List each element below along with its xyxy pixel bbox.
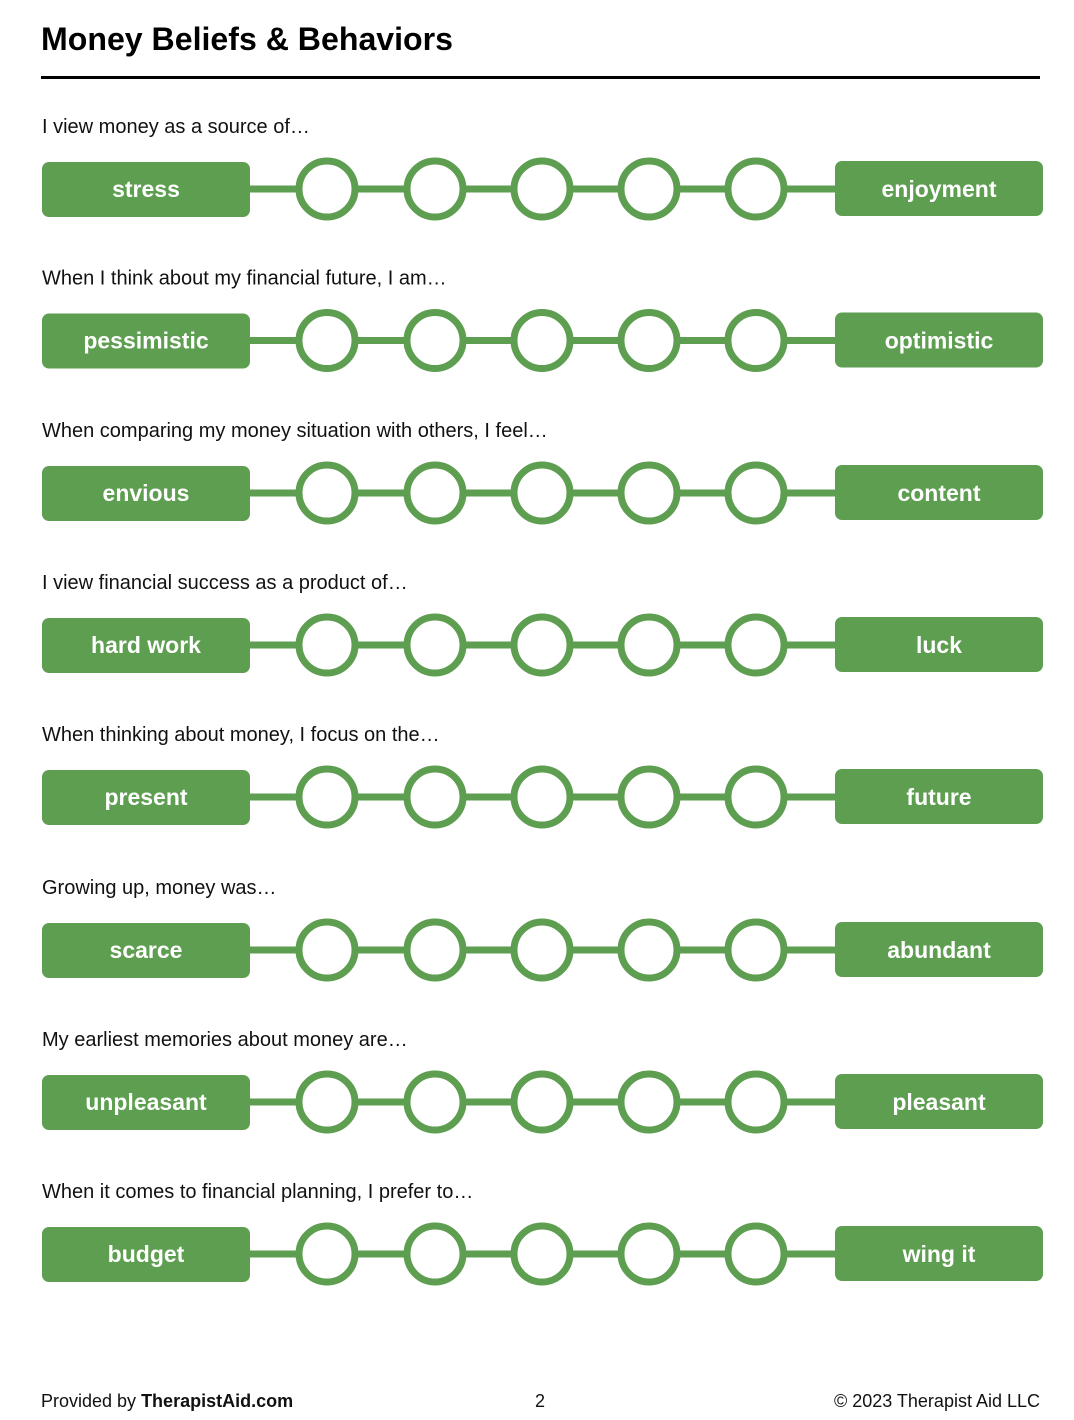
row 5: present / future: future xyxy=(906,784,972,810)
row 7: unpleasant / pleasant xyxy=(42,1029,1043,1130)
row 7: unpleasant / pleasant: My earliest memories about money are… xyxy=(42,1029,408,1051)
row 3: envious / content: When comparing my money situation with others, I feel… xyxy=(42,420,548,442)
row 3: envious / content: content xyxy=(897,480,981,506)
footer: © 2023 Therapist Aid LLC xyxy=(834,1391,1040,1411)
row 8: budget / wing it xyxy=(42,1181,1043,1282)
row 1: stress / enjoyment: enjoyment xyxy=(881,176,997,202)
row 2: pessimistic / optimistic xyxy=(42,268,1043,368)
row 6: scarce / abundant xyxy=(42,877,1043,978)
row 4: hard work / luck xyxy=(42,572,1043,673)
row 5: present / future: When thinking about money, I focus on the… xyxy=(42,724,440,746)
row 7: unpleasant / pleasant: unpleasant xyxy=(85,1089,207,1115)
row 2: pessimistic / optimistic: pessimistic xyxy=(83,328,209,354)
row 4: hard work / luck: luck xyxy=(916,632,962,658)
row 6: scarce / abundant: abundant xyxy=(887,937,991,963)
row 5: present / future: present xyxy=(104,784,188,810)
row 8: budget / wing it: budget xyxy=(108,1241,185,1267)
row 6: scarce / abundant: scarce xyxy=(110,937,182,963)
title: Money Beliefs & Behaviors xyxy=(41,21,453,57)
row 1: stress / enjoyment: I view money as a source of… xyxy=(42,116,310,138)
row 7: unpleasant / pleasant: pleasant xyxy=(892,1089,986,1115)
row 8: budget / wing it: When it comes to financial planning, I prefer to… xyxy=(42,1181,473,1203)
row 8: budget / wing it: wing it xyxy=(902,1241,976,1267)
row 4: hard work / luck: hard work xyxy=(91,632,201,658)
row 2: pessimistic / optimistic: When I think about my financial future, I am… xyxy=(42,268,447,290)
row 3: envious / content xyxy=(42,420,1043,521)
row 2: pessimistic / optimistic: optimistic xyxy=(885,328,994,354)
row 4: hard work / luck: I view financial success as a product of… xyxy=(42,572,408,594)
row 1: stress / enjoyment: stress xyxy=(112,176,180,202)
footer: 2 xyxy=(535,1391,545,1411)
row 1: stress / enjoyment xyxy=(42,116,1043,217)
row 6: scarce / abundant: Growing up, money was… xyxy=(42,877,277,899)
footer xyxy=(41,1391,1040,1411)
footer: Provided by TherapistAid.com xyxy=(41,1391,293,1411)
row 3: envious / content: envious xyxy=(103,480,189,506)
row 5: present / future xyxy=(42,724,1043,825)
